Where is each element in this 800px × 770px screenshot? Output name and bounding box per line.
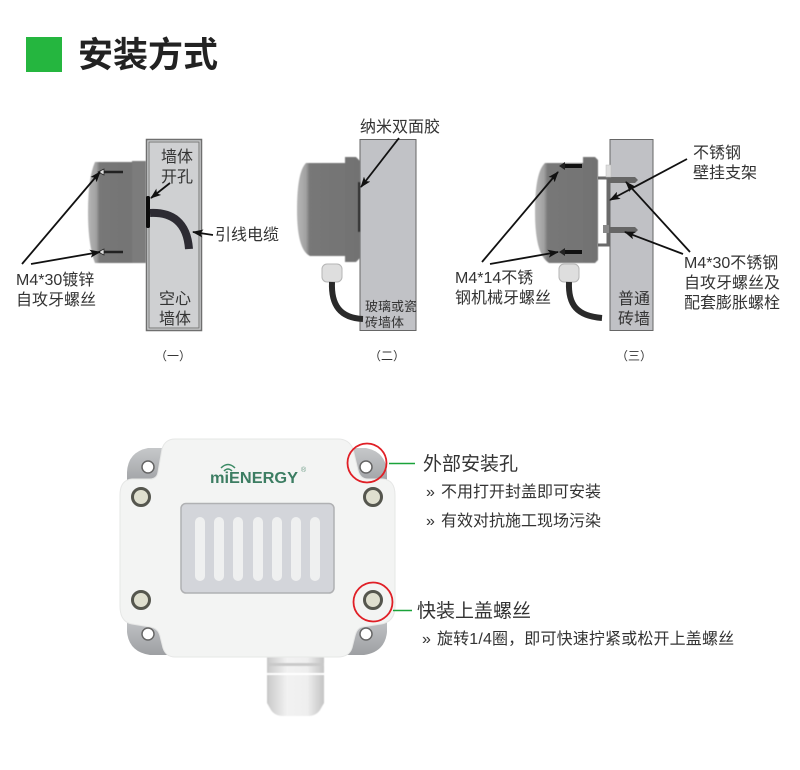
wall: brick bbox=[610, 140, 653, 330]
text: M4*30 screw label: M4*30不锈钢 bbox=[684, 255, 778, 272]
expansion bolts bbox=[603, 165, 638, 233]
panel: diagram 3 brick wall bbox=[455, 140, 780, 363]
text: callout heading: 外部安装孔 bbox=[423, 453, 518, 475]
text: cable label: 引线电缆 bbox=[215, 226, 279, 244]
panel: diagram 1 hollow wall bbox=[16, 140, 279, 363]
vent panel bbox=[181, 504, 334, 593]
caption: （三） bbox=[616, 349, 652, 363]
text: wall hole label: 墙体 bbox=[161, 149, 193, 166]
cable bbox=[150, 213, 189, 249]
heading: 安装方式: 安装方式 bbox=[78, 36, 218, 75]
logo: miENERGY: miENERGY bbox=[210, 470, 299, 487]
device side view bbox=[297, 157, 360, 262]
wall: glass or tile bbox=[360, 140, 416, 330]
logo: miENERGY: ® bbox=[301, 466, 307, 474]
red circle: mounting hole bbox=[348, 444, 386, 482]
text: bullet: 旋转1/4圈，即可快速拧紧或松开上盖螺丝 bbox=[437, 630, 734, 648]
red circle: cover screw bbox=[354, 582, 392, 622]
text: tape label: 纳米双面胶 bbox=[360, 118, 440, 136]
text: screw label: 自攻牙螺丝 bbox=[16, 291, 96, 309]
cable bbox=[569, 282, 602, 318]
caption: （二） bbox=[369, 349, 405, 363]
callout: quick-fit cover screws bbox=[393, 600, 734, 648]
text: hollow wall label: 墙体 bbox=[159, 310, 191, 328]
text: brick wall label: 普通 bbox=[618, 291, 650, 308]
text: bullet: » bbox=[422, 631, 431, 648]
wall hole bbox=[146, 196, 150, 228]
text: bullet 2: 有效对抗施工现场污染 bbox=[441, 512, 601, 530]
text: wall label: 玻璃或瓷 bbox=[365, 299, 417, 314]
cable bbox=[332, 282, 363, 319]
panel: device front view bbox=[120, 439, 395, 716]
text: bullet 2: » bbox=[426, 513, 435, 530]
cable gland bbox=[322, 264, 342, 282]
text: bracket label: 不锈钢 bbox=[693, 145, 741, 162]
callout: external mounting holes bbox=[389, 453, 601, 530]
logo: miENERGY bbox=[210, 464, 307, 487]
mounting holes bbox=[142, 461, 372, 640]
text: wall label: 砖墙体 bbox=[365, 315, 404, 330]
arrows bbox=[22, 172, 213, 264]
arrow bbox=[361, 138, 399, 187]
text: screw label: M4*30镀锌 bbox=[16, 272, 94, 289]
text: M4*30 screw label: 自攻牙螺丝及 bbox=[684, 274, 780, 292]
screws bbox=[559, 162, 582, 256]
screws bbox=[98, 169, 123, 255]
text: bullet 1: 不用打开封盖即可安装 bbox=[441, 483, 601, 501]
mounting ears bbox=[127, 448, 387, 655]
text: wall hole label: 开孔 bbox=[161, 168, 193, 186]
device side view bbox=[535, 157, 598, 263]
cover screws bbox=[132, 488, 382, 608]
wall: hollow wall bbox=[146, 140, 202, 330]
text: M4*30 screw label: 配套膨胀螺栓 bbox=[684, 294, 780, 312]
wall bracket bbox=[598, 178, 608, 245]
text: brick wall label: 砖墙 bbox=[618, 310, 650, 328]
housing bbox=[120, 439, 395, 657]
arrows bbox=[482, 159, 690, 264]
text: bullet 1: » bbox=[426, 484, 435, 501]
text: hollow wall label: 空心 bbox=[159, 291, 191, 308]
cable gland bbox=[559, 264, 579, 282]
gland bbox=[267, 657, 324, 716]
panel: diagram 2 glass or tile wall bbox=[297, 118, 440, 363]
text: callout heading: 快装上盖螺丝 bbox=[417, 600, 531, 622]
text: M4*14 screw label: 钢机械牙螺丝 bbox=[455, 289, 551, 307]
text: bracket label: 壁挂支架 bbox=[693, 163, 757, 182]
device side view bbox=[88, 161, 146, 263]
caption: （一） bbox=[155, 349, 191, 363]
text: M4*14 screw label: M4*14不锈 bbox=[455, 270, 533, 287]
